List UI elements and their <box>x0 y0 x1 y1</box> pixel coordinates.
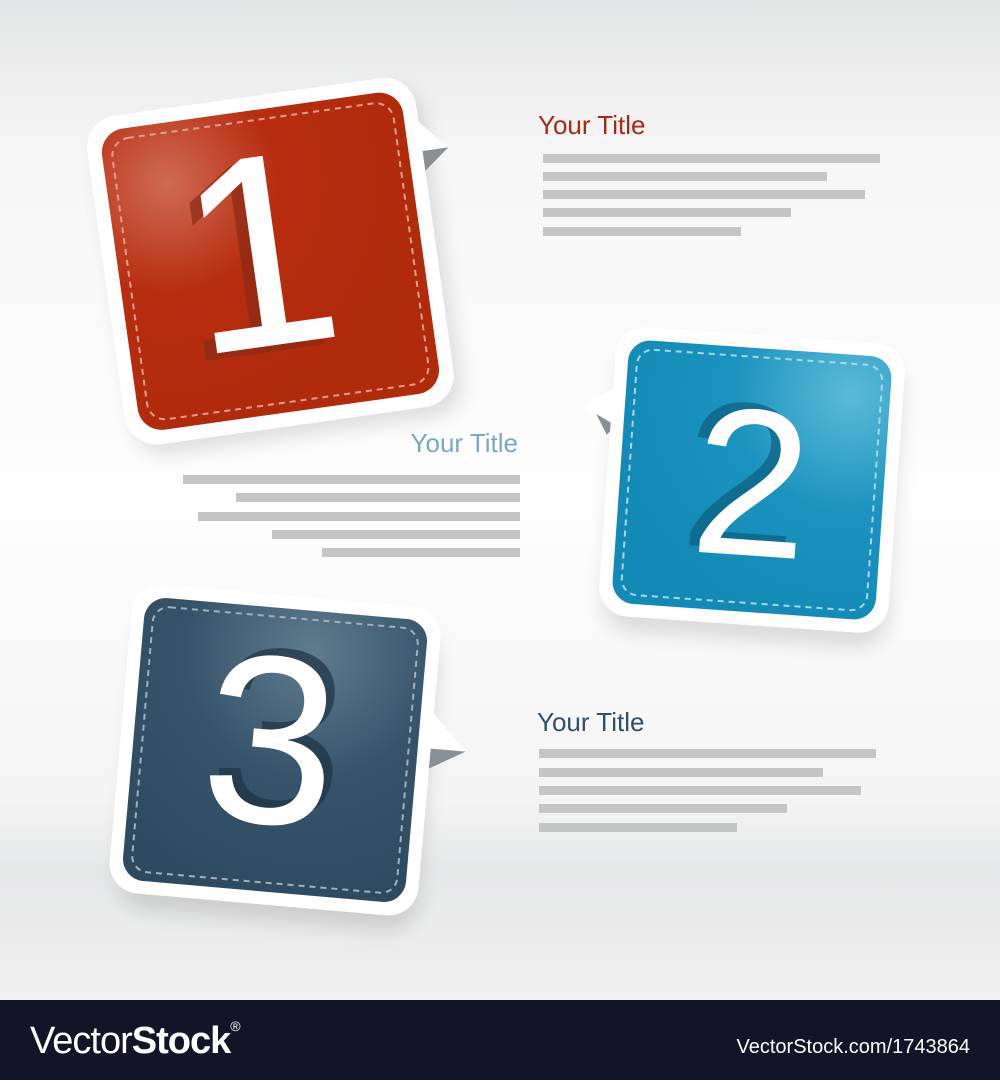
card 1: 1 <box>162 89 356 415</box>
card 3: 3 <box>201 593 358 872</box>
card 1: 1 <box>151 97 345 422</box>
footer bar: VectorStock.com/1743864 <box>737 1036 970 1058</box>
card 2 <box>566 323 907 650</box>
title 3 <box>537 707 876 832</box>
card 3: 3 <box>193 601 349 879</box>
title 1: Your Title <box>538 110 645 140</box>
title 3: Your Title <box>537 707 644 737</box>
card 3 <box>106 582 478 936</box>
footer bar: ® <box>230 1018 241 1034</box>
title 2 <box>183 428 520 557</box>
title 1 <box>538 110 880 236</box>
footer bar <box>0 1000 1000 1080</box>
card 1 <box>83 70 485 460</box>
footer bar: VectorStock <box>30 1020 230 1062</box>
title 2: Your Title <box>411 428 518 458</box>
card 2: 2 <box>676 355 809 598</box>
card 2: 2 <box>685 362 818 604</box>
